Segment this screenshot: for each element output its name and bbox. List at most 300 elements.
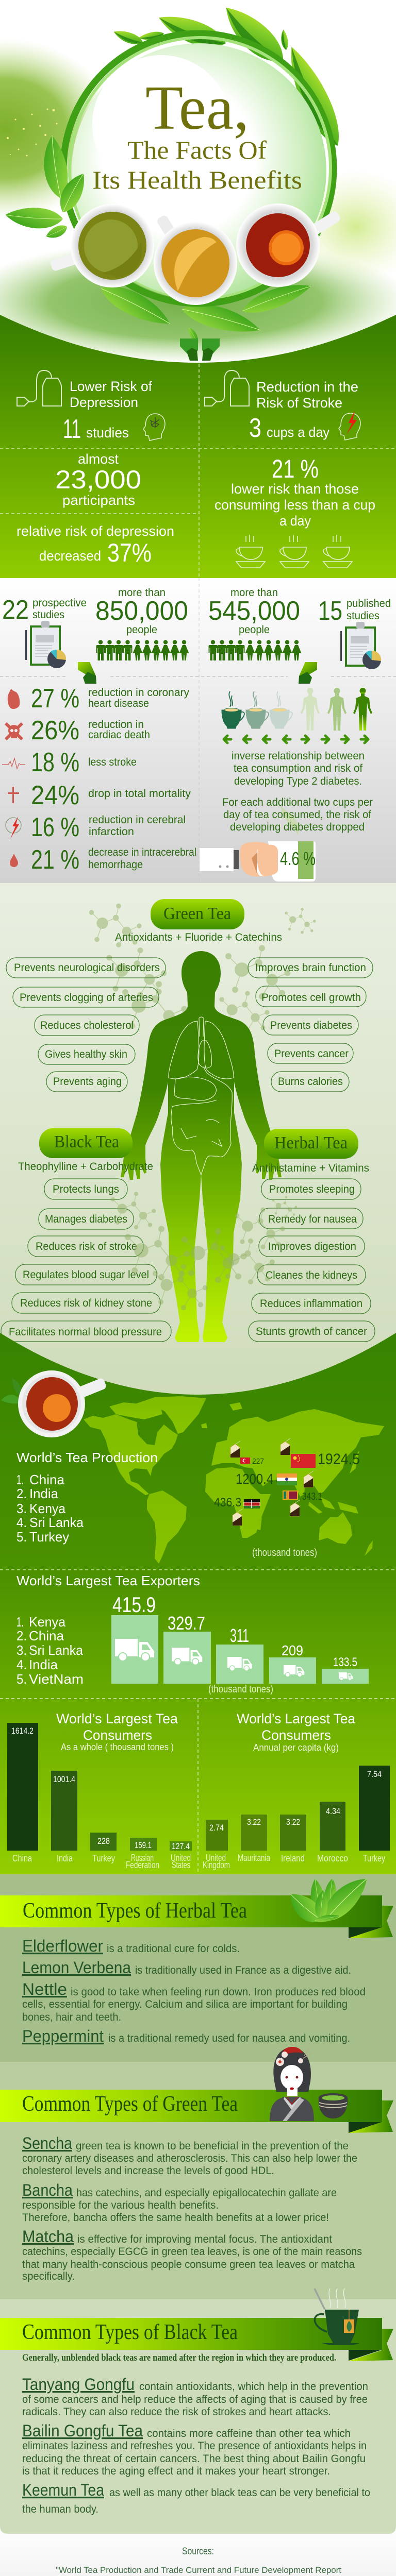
text: bailin gongfu: Bailin Gongfu Tea xyxy=(22,2421,143,2440)
icon: red tea cup with leaf xyxy=(1,1370,107,1437)
map markers: tea bags xyxy=(230,1438,314,1526)
stat: 27% coronary xyxy=(31,684,189,714)
benefit pill: Reduces inflammation xyxy=(260,1298,362,1310)
benefit pill xyxy=(12,1293,160,1313)
text: black tea types xyxy=(22,2352,370,2515)
ribbon: green tea xyxy=(0,2090,393,2133)
icon: cross xyxy=(8,787,19,803)
benefit pill: Regulates blood sugar level xyxy=(23,1269,149,1281)
stat: 21% intracerebral hemorrhage: 21 % xyxy=(31,845,79,875)
benefit pill: Reduces cholesterol xyxy=(40,1020,134,1031)
panel: herbal tea types background xyxy=(0,1874,396,2062)
text: matcha: is effective for improving mental focus. The antioxidant xyxy=(77,2233,332,2245)
stat: 26% cardiac death xyxy=(31,716,150,745)
text: diabetes drop xyxy=(222,796,373,833)
text: tanyang gongfu xyxy=(22,2375,368,2418)
benefit pill: Facilitates normal blood pressure xyxy=(9,1326,162,1338)
icon: tea leaves xyxy=(284,1870,374,1929)
panel: world production background xyxy=(0,1333,396,1874)
stat: 3 cups a day: 3 xyxy=(249,413,261,443)
heading pill: Herbal Tea xyxy=(264,1129,358,1159)
benefit pill: Promotes cell growth xyxy=(261,992,361,1004)
bar chart: consumers total: 1614.2 xyxy=(11,1726,34,1736)
bar chart: per capita xyxy=(206,1766,390,1851)
text: nettle: Nettle xyxy=(22,1980,67,1998)
ribbon: green tea: Common Types of Green Tea xyxy=(22,2092,238,2116)
panel: green tea types background xyxy=(0,2062,396,2299)
chart labels: per capita: Mauritania xyxy=(238,1853,271,1863)
stat: 27% coronary: heart disease xyxy=(88,698,149,709)
benefit pill xyxy=(252,1293,371,1314)
stat: 27% coronary: reduction in coronary xyxy=(88,687,189,699)
panel: black tea xyxy=(1,1128,171,1342)
stat: 27% coronary: 27 % xyxy=(31,684,79,714)
stat: 16% cerebral infarction: infarction xyxy=(89,826,134,838)
title: Tea, xyxy=(145,73,249,143)
stat: 11 studies xyxy=(63,414,129,444)
panel: black tea types background xyxy=(0,2299,396,2534)
stat: 21% lower risk: 21 % xyxy=(272,454,319,483)
heading: consumers per capita: Annual per capita (kg) xyxy=(253,1742,339,1753)
panel: green tea xyxy=(6,899,373,1092)
icon: brain with lightning xyxy=(6,817,21,839)
icon: curved arrow xyxy=(299,662,317,684)
benefit pill: Improves digestion xyxy=(268,1241,356,1252)
icon: curved arrow xyxy=(78,662,96,684)
text: lemon verbena xyxy=(22,1958,351,1977)
text: nettle xyxy=(22,1980,366,2023)
text: green tea types xyxy=(22,2134,362,2282)
benefit pill xyxy=(44,1179,127,1199)
text: diabetes drop: developing diabetes dropped xyxy=(230,821,365,833)
benefit pill xyxy=(15,1264,157,1285)
bar chart: per capita: 2.74 xyxy=(209,1823,224,1833)
icon: body silhouettes xyxy=(301,688,372,731)
benefit pill: Prevents neurological disorders xyxy=(14,962,160,974)
heading: consumers total xyxy=(56,1711,178,1752)
ribbon: herbal tea xyxy=(0,1895,393,1938)
benefit pill xyxy=(259,1236,365,1257)
text: matcha xyxy=(22,2227,362,2282)
text: sencha: green tea is known to be beneficial in the prevention of the xyxy=(76,2140,349,2152)
title: The Facts Of xyxy=(127,135,267,164)
benefit pill xyxy=(256,986,366,1007)
bar chart: exporters: 311 xyxy=(230,1625,249,1646)
text: world tea production: 2. xyxy=(16,1486,27,1501)
stat: 3 cups a day: cups a day xyxy=(267,425,329,440)
text: green tea compounds: Antioxidants + Fluoride + Catechins xyxy=(115,931,282,943)
heading: consumers total: As a whole ( thousand tones ) xyxy=(61,1742,174,1752)
icon: clipboard with pie xyxy=(340,622,381,669)
panel: exporters xyxy=(16,1573,369,1695)
stat: relative risk 37%: 37% xyxy=(107,538,152,567)
map label: Kenya xyxy=(214,1496,260,1510)
decoration: leaves behind ring xyxy=(96,0,349,345)
stat: 545,000 people: more than xyxy=(230,587,278,599)
panel: heart studies figures xyxy=(2,587,196,875)
heading: consumers per capita: Consumers xyxy=(261,1727,331,1743)
text: bancha: responsible for the various health benefits. xyxy=(22,2199,219,2211)
stat: 22 prospective studies: studies xyxy=(32,609,64,621)
benefit pill: Stunts growth of cancer xyxy=(256,1326,367,1337)
stat: 26% cardiac death: reduction in xyxy=(88,719,144,731)
text: keemun tea: Keemun Tea xyxy=(22,2481,104,2499)
benefit pill: Improves brain function xyxy=(255,962,366,974)
heading: lower risk of depression xyxy=(70,379,152,410)
text: world tea production: World’s Tea Production xyxy=(16,1450,158,1465)
text: tanyang gongfu: Tanyang Gongfu xyxy=(22,2375,135,2394)
icon: black tea mug xyxy=(315,2289,360,2345)
decoration: glass disk xyxy=(72,43,326,298)
text: herbal tea compounds: Antihistamine + Vitamins xyxy=(252,1162,369,1174)
benefit pill: Gives healthy skin xyxy=(45,1048,127,1060)
icon: tea bag xyxy=(205,370,249,406)
stat: 23,000 participants xyxy=(55,451,141,508)
dividers xyxy=(0,1570,396,1874)
stat: 23,000 participants: participants xyxy=(62,493,135,508)
icon: green tea cup xyxy=(50,204,154,287)
chart labels: per capita: Ireland xyxy=(281,1853,305,1863)
text: world tea production: 3. xyxy=(16,1501,27,1516)
stat: 850,000 people xyxy=(95,587,188,636)
bar chart: exporters: 329.7 xyxy=(168,1613,205,1634)
panel: depression xyxy=(16,370,174,567)
heading: consumers per capita: World’s Largest Tea xyxy=(237,1711,356,1726)
text: inverse relationship xyxy=(232,750,365,787)
text: world tea production: Kenya xyxy=(29,1501,66,1516)
panel: diabetes figures xyxy=(200,587,391,882)
stat: 11 studies: studies xyxy=(86,425,129,440)
text: sencha: coronary artery diseases and atherosclerosis. This can also help lower the xyxy=(22,2153,357,2164)
benefit pill xyxy=(271,1072,349,1092)
panel: tea benefits background xyxy=(0,883,396,1398)
icon: heart xyxy=(8,689,20,709)
text: tanyang gongfu: contain antioxidants, which help in the prevention xyxy=(139,2381,368,2393)
chart labels: consumers total: States xyxy=(172,1860,190,1870)
text: bailin gongfu: reducing the threat of certain cancers. The best thing about Bailin Gongfu xyxy=(22,2453,366,2465)
text: sencha: cholesterol levels and increase the levels of good HDL. xyxy=(22,2165,274,2177)
stat: 15 published studies: 15 xyxy=(318,596,342,626)
map label: Turkey xyxy=(240,1457,264,1466)
stat: relative risk 37% xyxy=(16,523,174,567)
title xyxy=(92,73,302,194)
stat: relative risk 37%: decreased xyxy=(39,548,101,564)
stat: 18% less stroke: 18 % xyxy=(31,748,79,777)
dividers xyxy=(0,364,396,578)
bar chart: consumers total: 127.4 xyxy=(172,1841,190,1851)
benefit pill: Prevents cancer xyxy=(274,1048,349,1060)
stat: 21% intracerebral hemorrhage: hemorrhage xyxy=(88,859,143,871)
icon: head with tangle xyxy=(143,414,165,440)
icon: clipboard with pie xyxy=(25,621,66,668)
heading: lower risk of depression: Lower Risk of xyxy=(70,379,152,394)
list: exporters: China xyxy=(29,1628,64,1643)
chart labels: consumers total: India xyxy=(57,1853,73,1863)
benefit pill: Manages diabetes xyxy=(45,1213,127,1225)
decoration: left leaf sprig xyxy=(5,134,91,242)
benefit pill: Remedy for nausea xyxy=(268,1213,357,1225)
note: thousand tones: (thousand tones) xyxy=(252,1547,317,1558)
benefit pill: Protects lungs xyxy=(53,1183,119,1195)
text: lemon verbena: is traditionally used in France as a digestive aid. xyxy=(135,1964,351,1976)
ribbon: black tea: Common Types of Black Tea xyxy=(22,2320,238,2344)
stat: 15 published studies: published xyxy=(346,598,391,609)
chart labels: per capita: Kingdom xyxy=(203,1860,230,1870)
map label: Turkey: 227 xyxy=(252,1457,264,1466)
panel: herbal tea xyxy=(249,1129,375,1342)
list: exporters: VietNam xyxy=(29,1671,84,1687)
map label: Kenya: 436.3 xyxy=(214,1496,241,1510)
chart labels: per capita xyxy=(203,1853,385,1870)
heading pill: Green Tea: Green Tea xyxy=(163,904,231,923)
icon: matcha bowl xyxy=(319,2093,348,2119)
stat: 850,000 people: 850,000 xyxy=(95,596,188,626)
text: elderflower xyxy=(22,1937,240,1955)
panel: hero background xyxy=(0,0,396,371)
heading: exporters: World’s Largest Tea Exporters xyxy=(16,1573,200,1588)
decoration: sparkles xyxy=(7,108,58,157)
text: bancha: Therefore, bancha offers the same health benefits at a lower price! xyxy=(22,2212,329,2224)
chart labels: per capita: United xyxy=(206,1853,226,1863)
text: peppermint: Peppermint xyxy=(22,2027,104,2045)
text: herbal tea types xyxy=(22,1937,366,2045)
text: diabetes drop: day of tea consumed, the risk of xyxy=(223,809,371,821)
text: world tea production: 4. xyxy=(16,1515,27,1530)
text: world tea production: Turkey xyxy=(29,1529,69,1545)
chart labels: consumers total: Russian xyxy=(131,1853,154,1863)
stat: 24% mortality xyxy=(31,781,191,810)
list: exporters xyxy=(16,1614,84,1687)
stat: 4.6%: 4.6 % xyxy=(280,848,316,869)
text: inverse relationship: developing Type 2 diabetes. xyxy=(234,775,362,787)
panel: stroke xyxy=(205,370,375,568)
stat: 21% lower risk: a day xyxy=(279,513,311,529)
heading: consumers total: World’s Largest Tea xyxy=(56,1711,178,1726)
heading: reduction in risk of stroke xyxy=(256,379,358,411)
benefit pill xyxy=(46,1072,127,1092)
benefit pill: Cleanes the kidneys xyxy=(266,1269,357,1281)
text: bancha: Bancha xyxy=(22,2181,73,2199)
stat: 22 prospective studies xyxy=(2,595,87,625)
map label: China: 1924.5 xyxy=(318,1451,360,1468)
benefit pill xyxy=(39,1209,134,1229)
icon: organs outline xyxy=(169,1017,234,1175)
bar chart: exporters: 209 xyxy=(282,1642,303,1658)
stat: 545,000 people xyxy=(208,587,300,636)
note: thousand tones: (thousand tones) xyxy=(208,1684,273,1695)
text: matcha: Matcha xyxy=(22,2227,74,2246)
chart labels: consumers total: Federation xyxy=(126,1860,159,1870)
text: nettle: is good to take when feeling run down. Iron produces red blood xyxy=(71,1986,366,1998)
text: inverse relationship: tea consumption and risk of xyxy=(234,762,362,774)
text: matcha: catechins, especially EGCG in green tea leaves, is one of the main reasons xyxy=(22,2246,362,2258)
bar chart: consumers total: 159.1 xyxy=(135,1840,152,1850)
text: elderflower: is a traditional cure for colds. xyxy=(107,1943,240,1955)
heading: reduction in risk of stroke: Reduction in the xyxy=(256,379,358,395)
stat: 26% cardiac death: 26% xyxy=(31,716,79,745)
text: inverse relationship: inverse relationship between xyxy=(232,750,365,762)
text: tanyang gongfu: radicals. They can also reduce the risk of strokes and heart attacks. xyxy=(22,2406,331,2418)
text: sources xyxy=(37,2546,360,2576)
decoration: molecules upper xyxy=(89,904,316,1035)
benefit pill xyxy=(28,1236,143,1257)
heading: consumers total: Consumers xyxy=(83,1727,152,1743)
heading pill: Green Tea xyxy=(151,899,244,929)
stat: 545,000 people: people xyxy=(239,624,270,636)
map label: India: 1200.4 xyxy=(236,1471,273,1487)
benefit pill xyxy=(1,1321,171,1342)
stat: 16% cerebral infarction xyxy=(31,812,186,842)
text: diabetes drop: For each additional two cups per xyxy=(222,796,373,808)
stat: 18% less stroke xyxy=(31,748,137,777)
stat: 15 published studies: studies xyxy=(346,610,380,622)
benefit pill xyxy=(248,958,373,978)
stat: 3 cups a day xyxy=(249,413,329,443)
benefit pill xyxy=(35,1015,139,1036)
text: world tea production xyxy=(16,1450,158,1545)
heading: reduction in risk of stroke: Risk of Stroke xyxy=(256,395,342,411)
icon: head with lightning xyxy=(339,411,360,440)
text: peppermint xyxy=(22,2027,350,2045)
heading pill: Black Tea xyxy=(39,1128,133,1158)
bar chart: exporters: 133.5 xyxy=(333,1655,357,1669)
stat: 22 prospective studies: 22 xyxy=(2,595,29,625)
benefit pill xyxy=(38,1044,135,1064)
icon: people row xyxy=(96,640,189,660)
illustration: human body xyxy=(121,951,282,1342)
decoration: steam wisp xyxy=(280,805,299,835)
stat: 545,000 people: 545,000 xyxy=(208,596,300,626)
stat: 23,000 participants: almost xyxy=(78,451,119,467)
stat: 850,000 people: people xyxy=(126,624,157,636)
heading pill: Herbal Tea: Herbal Tea xyxy=(274,1133,348,1153)
stat: 11 studies: 11 xyxy=(63,414,81,444)
stat: 24% mortality: 24% xyxy=(31,781,79,810)
stat: 21% lower risk xyxy=(214,454,375,529)
stat: 18% less stroke: less stroke xyxy=(88,756,137,768)
text: bailin gongfu: is that it reduces the aging effect and it makes your heart stronger. xyxy=(22,2465,330,2477)
benefit pill: Promotes sleeping xyxy=(269,1183,355,1195)
text: keemun tea: the human body. xyxy=(22,2503,98,2515)
benefit pill: Prevents clogging of arteries xyxy=(20,992,153,1004)
chart labels: consumers total: Turkey xyxy=(92,1853,115,1863)
text: world tea production: India xyxy=(29,1486,59,1501)
stat: 21% lower risk: consuming less than a cup xyxy=(214,497,375,513)
text: matcha: specifically. xyxy=(22,2270,75,2282)
bar chart: exporters xyxy=(111,1592,369,1684)
panel: green stats background xyxy=(0,315,396,578)
stat: 24% mortality: drop in total mortality xyxy=(88,788,191,800)
icon: yellow tea cup xyxy=(154,214,237,305)
text: bancha xyxy=(22,2181,337,2224)
text: keemun tea xyxy=(22,2481,370,2515)
text: lemon verbena: Lemon Verbena xyxy=(22,1958,131,1977)
text: keemun tea: as well as many other black teas can be very beneficial to xyxy=(109,2487,370,2499)
icon: three steaming cups xyxy=(236,535,352,568)
icon: blood drop xyxy=(10,854,18,867)
text: tanyang gongfu: of some cancers and help reduce the affects of aging that is caused by free xyxy=(22,2394,368,2405)
stat: 16% cerebral infarction: reduction in cerebral xyxy=(89,814,186,826)
decoration: molecules lower xyxy=(111,1192,297,1310)
chart labels: per capita: Turkey xyxy=(363,1853,385,1863)
ribbon: black tea xyxy=(0,2318,393,2361)
benefit pill xyxy=(257,1265,366,1285)
text: sencha xyxy=(22,2134,357,2177)
text: bailin gongfu: eliminates laziness and refreshes you. The presence of antioxidants helps in xyxy=(22,2440,367,2452)
text: world tea production: 5. xyxy=(16,1529,27,1545)
icon: people row xyxy=(208,640,301,660)
icon: red tea cup xyxy=(236,204,341,287)
illustration: geisha xyxy=(270,2047,314,2121)
icon: hand holding mug xyxy=(200,841,316,882)
benefit pill: Prevents diabetes xyxy=(270,1020,352,1031)
ribbon: herbal tea: Common Types of Herbal Tea xyxy=(23,1899,247,1923)
text: matcha: that many health-conscious people consume green tea leaves or matcha xyxy=(22,2259,355,2270)
icon: tea bag xyxy=(17,370,61,406)
text: black tea intro: Generally, unblended black teas are named after the region in which they are produced. xyxy=(22,2352,336,2363)
heading: lower risk of depression: Depression xyxy=(70,395,138,410)
bar chart: exporters: 415.9 xyxy=(112,1592,156,1617)
bar chart: per capita: 7.54 xyxy=(367,1769,382,1779)
benefit pill xyxy=(259,1208,363,1229)
heading: consumers per capita xyxy=(237,1711,356,1753)
benefit pill: Burns calories xyxy=(278,1076,343,1088)
stat: 15 published studies xyxy=(318,596,391,626)
text: sources: Sources: xyxy=(182,2546,214,2557)
text: bailin gongfu xyxy=(22,2421,367,2477)
stat: 21% lower risk: lower risk than those xyxy=(231,481,359,497)
text: nettle: cells, essential for energy. Calcium and silica are important for building xyxy=(22,1998,348,2010)
chart labels: consumers total: China xyxy=(12,1853,32,1863)
stat: 16% cerebral infarction: 16 % xyxy=(31,812,79,842)
map label: Sri Lanka: 343.1 xyxy=(302,1491,322,1502)
stat: 23,000 participants: 23,000 xyxy=(55,465,141,494)
chart labels: consumers total xyxy=(12,1853,191,1870)
benefit pill: Reduces risk of stroke xyxy=(36,1241,137,1252)
icon: pulse line xyxy=(2,758,25,769)
list: exporters: 2. xyxy=(16,1628,27,1643)
bar chart: per capita: 4.34 xyxy=(326,1806,340,1816)
stat: 22 prospective studies: prospective xyxy=(32,597,87,609)
panel: studies background xyxy=(0,578,396,883)
bar chart: consumers total: 228 xyxy=(97,1836,110,1846)
benefit pill xyxy=(6,958,166,978)
benefit pill: Prevents aging xyxy=(53,1076,122,1088)
text: peppermint: is a traditional remedy used for nausea and vomiting. xyxy=(108,2032,350,2044)
benefit pill xyxy=(263,1015,358,1035)
stat: 26% cardiac death: cardiac death xyxy=(88,729,150,741)
panel: consumers as a whole xyxy=(7,1711,192,1870)
list: exporters: 3. xyxy=(16,1642,27,1658)
bar chart: consumers total: 1001.4 xyxy=(53,1774,75,1784)
panel: consumers per capita xyxy=(203,1711,390,1870)
list: exporters: 5. xyxy=(16,1671,27,1687)
icon: direction arrows xyxy=(224,736,368,743)
title: Its Health Benefits xyxy=(92,165,302,194)
map: world xyxy=(84,1396,384,1564)
bar chart: consumers total xyxy=(7,1723,192,1851)
benefit pill: Reduces risk of kidney stone xyxy=(20,1297,152,1309)
stat: 21% intracerebral hemorrhage: decrease in intracerebral xyxy=(88,846,196,858)
bar chart: per capita: 3.22 xyxy=(286,1817,300,1827)
panel: footer background xyxy=(0,2524,396,2576)
chart labels: consumers total: United xyxy=(171,1853,191,1863)
decoration: green ring frame xyxy=(63,33,334,303)
text: black tea compounds: Theophylline + Carbohydrate xyxy=(18,1161,153,1173)
heading pill: Black Tea: Black Tea xyxy=(54,1132,119,1151)
text: elderflower: Elderflower xyxy=(22,1937,103,1955)
benefit pill xyxy=(13,987,159,1007)
